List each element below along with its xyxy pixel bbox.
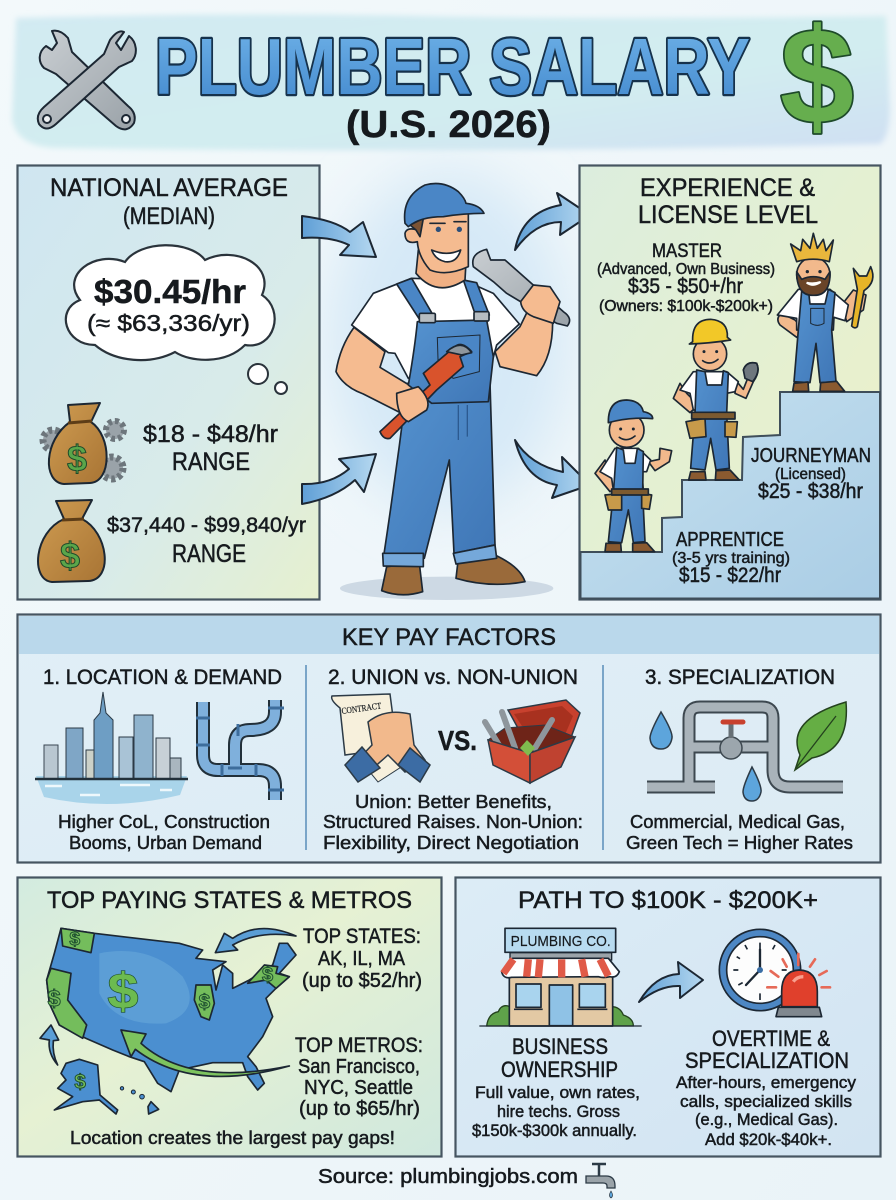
arrow: shop to clock <box>639 962 703 1002</box>
text: top metros: San Francisco, <box>298 1056 420 1078</box>
left arm <box>336 327 417 413</box>
text: vs: VS. <box>438 725 477 756</box>
title: PLUMBER SALARY <box>155 22 750 111</box>
right fist <box>521 285 560 323</box>
ground shadow <box>340 577 553 600</box>
factor 1 description: Booms, Urban Demand <box>69 832 262 853</box>
factor 2 description: Structured Raises. Non-Union: <box>323 811 583 832</box>
left hand <box>397 387 428 422</box>
overalls pants <box>383 383 497 567</box>
callout: pay gaps: Location creates the largest pay gaps! <box>70 1128 395 1148</box>
map of the United States <box>40 928 296 1114</box>
figure: master plumber <box>777 233 873 391</box>
panel: key pay factors <box>18 614 880 862</box>
panel: top paying states and metros <box>18 878 442 1156</box>
icon: contract and handshake <box>332 694 430 782</box>
figure: main plumber <box>336 183 570 600</box>
icon: green leaf <box>795 702 846 770</box>
text: master: MASTER <box>652 241 722 262</box>
central background glow <box>328 170 568 510</box>
icon: plumbing shop: PLUMBING CO. <box>511 934 611 950</box>
panel: experience and license level <box>580 166 880 600</box>
subtitle: (U.S. 2026) <box>346 104 551 146</box>
stairs <box>580 392 880 598</box>
text: apprentice: $15 - $22/hr <box>679 564 781 587</box>
heading: experience <box>638 174 818 229</box>
factor 2 description <box>323 791 583 853</box>
icon: pipes <box>196 700 284 800</box>
state: Illinois: $ <box>199 990 211 1013</box>
text: top metros <box>295 1034 423 1120</box>
heading: overtime: OVERTIME & <box>712 1026 830 1051</box>
text: top states: TOP STATES: <box>303 925 421 948</box>
gray pipe wrench <box>473 249 570 326</box>
heading: national average <box>50 174 288 230</box>
text: top states: (up to $52/hr) <box>302 970 422 992</box>
icon: clock and siren <box>719 929 830 1017</box>
heading: experience: LICENSE LEVEL <box>638 201 818 229</box>
heading: national average: (MEDIAN) <box>123 203 215 230</box>
Hawaii <box>120 1087 159 1114</box>
icon: faucet <box>586 1164 615 1198</box>
state: Massachusetts and New York: $ <box>262 965 273 987</box>
state: Washington: $ <box>69 929 80 950</box>
text: top states: AK, IL, MA <box>318 948 406 970</box>
text: overtime description: Add $20k-$40k+. <box>705 1131 832 1149</box>
factor 3 description: Commercial, Medical Gas, <box>630 811 845 832</box>
neck and head <box>405 183 484 288</box>
text: master: (Owners: $100k-$200k+) <box>599 298 773 315</box>
thought cloud: (≈ $63,336/yr) <box>87 310 250 336</box>
text: overtime description <box>676 1074 857 1149</box>
heading: national average: NATIONAL AVERAGE <box>50 174 288 202</box>
heading: business ownership: BUSINESS <box>512 1034 608 1059</box>
text: business description <box>472 1084 640 1140</box>
factor 3 description: Green Tech = Higher Rates <box>626 832 853 853</box>
icon: contract and handshake: CONTRACT <box>341 700 382 716</box>
text: master: (Advanced, Own Business) <box>597 261 775 278</box>
source: Source: plumbingjobs.com <box>318 1166 578 1188</box>
icon: toolbox <box>485 700 580 783</box>
state: California: $ <box>48 986 61 1012</box>
text: business description: hire techs. Gross <box>497 1103 620 1121</box>
factor 1 heading: 1. LOCATION & DEMAND <box>43 666 282 689</box>
thought cloud: $30.45/hr <box>94 273 246 310</box>
thought cloud <box>66 245 287 394</box>
salary range annual <box>107 514 306 568</box>
heading: business ownership: OWNERSHIP <box>501 1057 618 1082</box>
text: journeyman: $25 - $38/hr <box>758 480 863 503</box>
shirt <box>352 278 519 378</box>
panel: national average <box>18 166 320 600</box>
arrow: top left <box>302 216 376 257</box>
figure: apprentice plumber <box>595 400 672 552</box>
icon: money bag: $ <box>60 535 80 576</box>
factor 1 description: Higher CoL, Construction <box>58 811 270 832</box>
red pipe wrench <box>380 345 472 439</box>
text: business description: $150k-$300k annually. <box>472 1122 637 1140</box>
factor 2 description: Flexibility, Direct Negotiation <box>323 832 579 853</box>
heading: business ownership <box>501 1034 618 1082</box>
header banner <box>12 0 890 152</box>
heading: overtime <box>685 1026 849 1073</box>
icon: crossed wrenches <box>38 31 136 129</box>
salary range hourly: RANGE <box>172 448 250 476</box>
state: Washington <box>61 928 94 953</box>
icon: city skyline <box>35 692 188 804</box>
state: California <box>47 968 87 1038</box>
Alaska <box>54 1059 118 1114</box>
text: top metros: (up to $65/hr) <box>299 1098 420 1120</box>
text: top metros: TOP METROS: <box>295 1034 423 1057</box>
arrow to top metros <box>121 1030 289 1076</box>
center dollar: $ <box>108 963 139 1019</box>
header band <box>19 616 879 654</box>
state: Massachusetts and New York <box>248 965 289 988</box>
factor 2 heading: 2. UNION vs. NON-UNION <box>328 666 578 689</box>
text: apprentice: APPRENTICE <box>676 529 784 551</box>
arrow: bottom left <box>302 454 376 504</box>
state: Illinois <box>194 985 214 1020</box>
text: overtime description: calls, specialized skills <box>680 1093 852 1111</box>
factor 3 description <box>626 811 853 853</box>
text: journeyman: (Licensed) <box>775 466 846 483</box>
panel: path to 100k - 200k <box>456 878 880 1156</box>
text: business description: Full value, own rates, <box>475 1084 640 1102</box>
icon: pipes with valve <box>647 707 843 787</box>
factor 1 description <box>58 811 270 853</box>
heading: experience: EXPERIENCE & <box>640 174 815 202</box>
icon: money bag with gears <box>43 403 124 484</box>
factor 3 heading: 3. SPECIALIZATION <box>645 666 835 689</box>
arrow to top states <box>215 929 296 953</box>
overalls bib <box>397 278 493 403</box>
text: journeyman: JOURNEYMAN <box>751 445 871 467</box>
text: master <box>597 241 775 315</box>
text: master: $35 - $50+/hr <box>628 275 743 298</box>
heading: key pay factors: KEY PAY FACTORS <box>342 624 556 651</box>
icon: money bag <box>38 500 105 582</box>
arrow from Alaska <box>40 1025 59 1065</box>
heading: overtime: SPECIALIZATION <box>685 1048 849 1073</box>
text: overtime description: (e.g., Medical Gas). <box>695 1111 838 1129</box>
salary range annual: $37,440 - $99,840/yr <box>107 514 306 537</box>
text: top metros: NYC, Seattle <box>304 1077 413 1099</box>
heading: top paying: TOP PAYING STATES & METROS <box>47 887 412 914</box>
arrow: top right <box>515 193 590 250</box>
arrow: bottom right <box>515 440 590 498</box>
factor 2 description: Union: Better Benefits, <box>355 791 552 812</box>
text: apprentice: (3-5 yrs training) <box>672 550 790 567</box>
text: top states <box>302 925 422 992</box>
boots <box>382 555 525 595</box>
text: overtime description: After-hours, emergency <box>676 1074 857 1092</box>
icon: money bag with gears: $ <box>67 438 87 479</box>
icon: water drop bottom <box>743 767 761 801</box>
icon: water drop left <box>650 712 672 749</box>
right arm <box>495 312 553 376</box>
salary range hourly <box>143 421 278 476</box>
text: apprentice <box>672 529 790 587</box>
figure: journeyman plumber <box>673 319 758 480</box>
salary range annual: RANGE <box>172 540 246 568</box>
Alaska: $ <box>74 1070 86 1093</box>
icon: dollar sign: $ <box>780 0 854 152</box>
icon: plumbing shop <box>479 928 642 1026</box>
heading: path: PATH TO $100K - $200K+ <box>518 887 818 914</box>
text: journeyman <box>751 445 871 503</box>
salary range hourly: $18 - $48/hr <box>143 421 278 448</box>
